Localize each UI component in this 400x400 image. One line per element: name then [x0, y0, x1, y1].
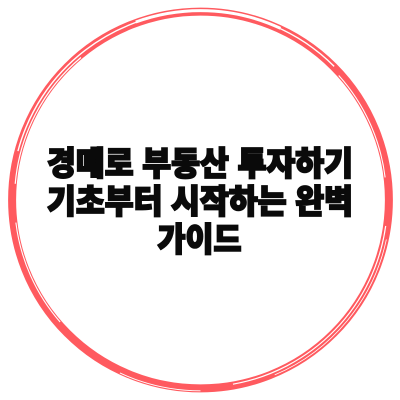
title: headline text: [47, 145, 353, 258]
title line 3: 가이드: [158, 221, 242, 258]
title line 1: 경매로 부동산 투자하기: [47, 145, 353, 182]
title line 2: 기초부터 시작하는 완벽: [47, 183, 353, 220]
